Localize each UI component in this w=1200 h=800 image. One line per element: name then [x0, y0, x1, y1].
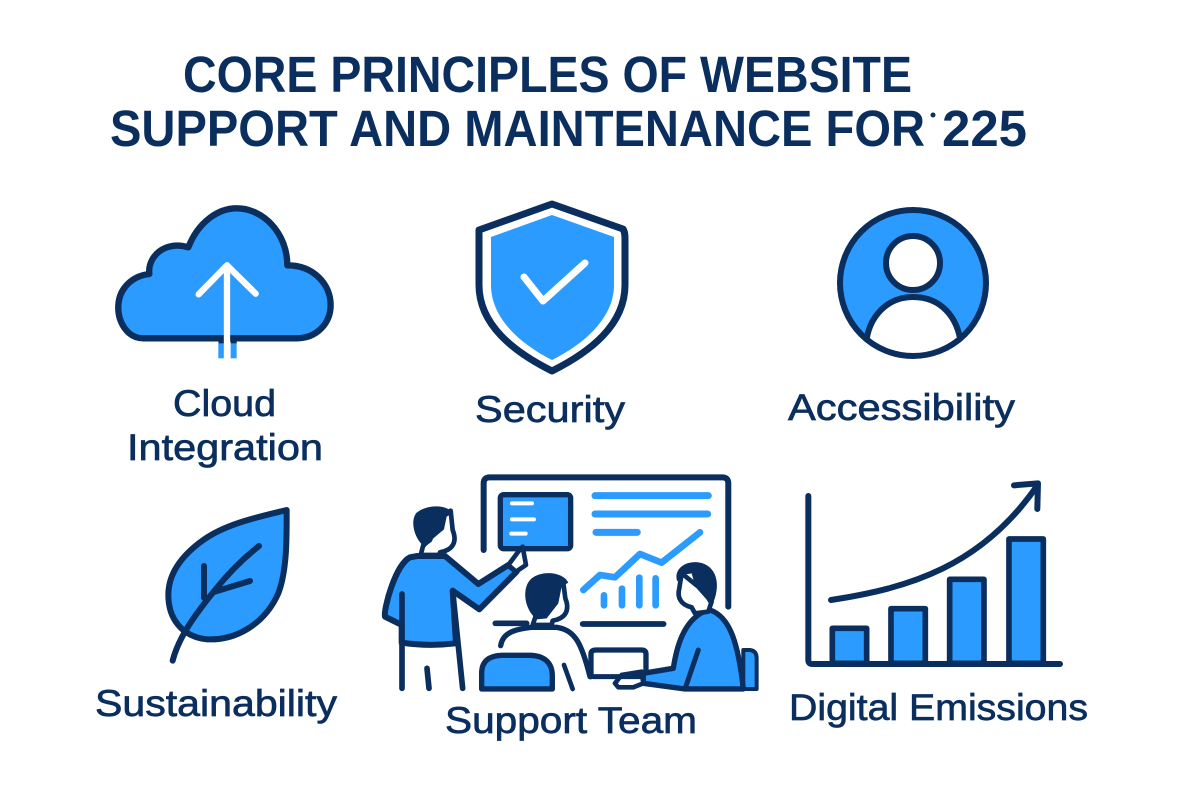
title: SUPPORT AND MAINTENANCE FOR: [110, 100, 925, 157]
presentation board: [484, 477, 728, 624]
icon: cloud upload: [118, 208, 331, 358]
label: accessibility: Accessibility: [788, 387, 1016, 428]
presenter: [385, 506, 526, 688]
icon: security shield: [479, 204, 625, 371]
label: security: Security: [475, 389, 626, 430]
axes: [808, 496, 1060, 664]
label: cloud integration: [127, 383, 323, 468]
label: sustainability: Sustainability: [95, 683, 338, 724]
label: support team: Support Team: [445, 700, 697, 741]
illustration: support team: [385, 477, 757, 689]
bars: [832, 539, 1043, 663]
chart: digital emissions: [808, 483, 1060, 664]
label: digital emissions: Digital Emissions: [789, 687, 1088, 728]
icon: accessibility person: [840, 210, 986, 370]
laptop: [591, 650, 646, 677]
seated colleague right: [593, 562, 757, 689]
label: cloud integration: Cloud: [173, 383, 276, 424]
trend arrow: [831, 483, 1038, 600]
title: 225: [942, 100, 1027, 157]
title: [110, 46, 1027, 157]
seated colleague centre: [482, 573, 590, 689]
icon: sustainability leaf: [168, 510, 287, 661]
label: cloud integration: Integration: [127, 427, 323, 468]
title: CORE PRINCIPLES OF WEBSITE: [183, 46, 912, 103]
